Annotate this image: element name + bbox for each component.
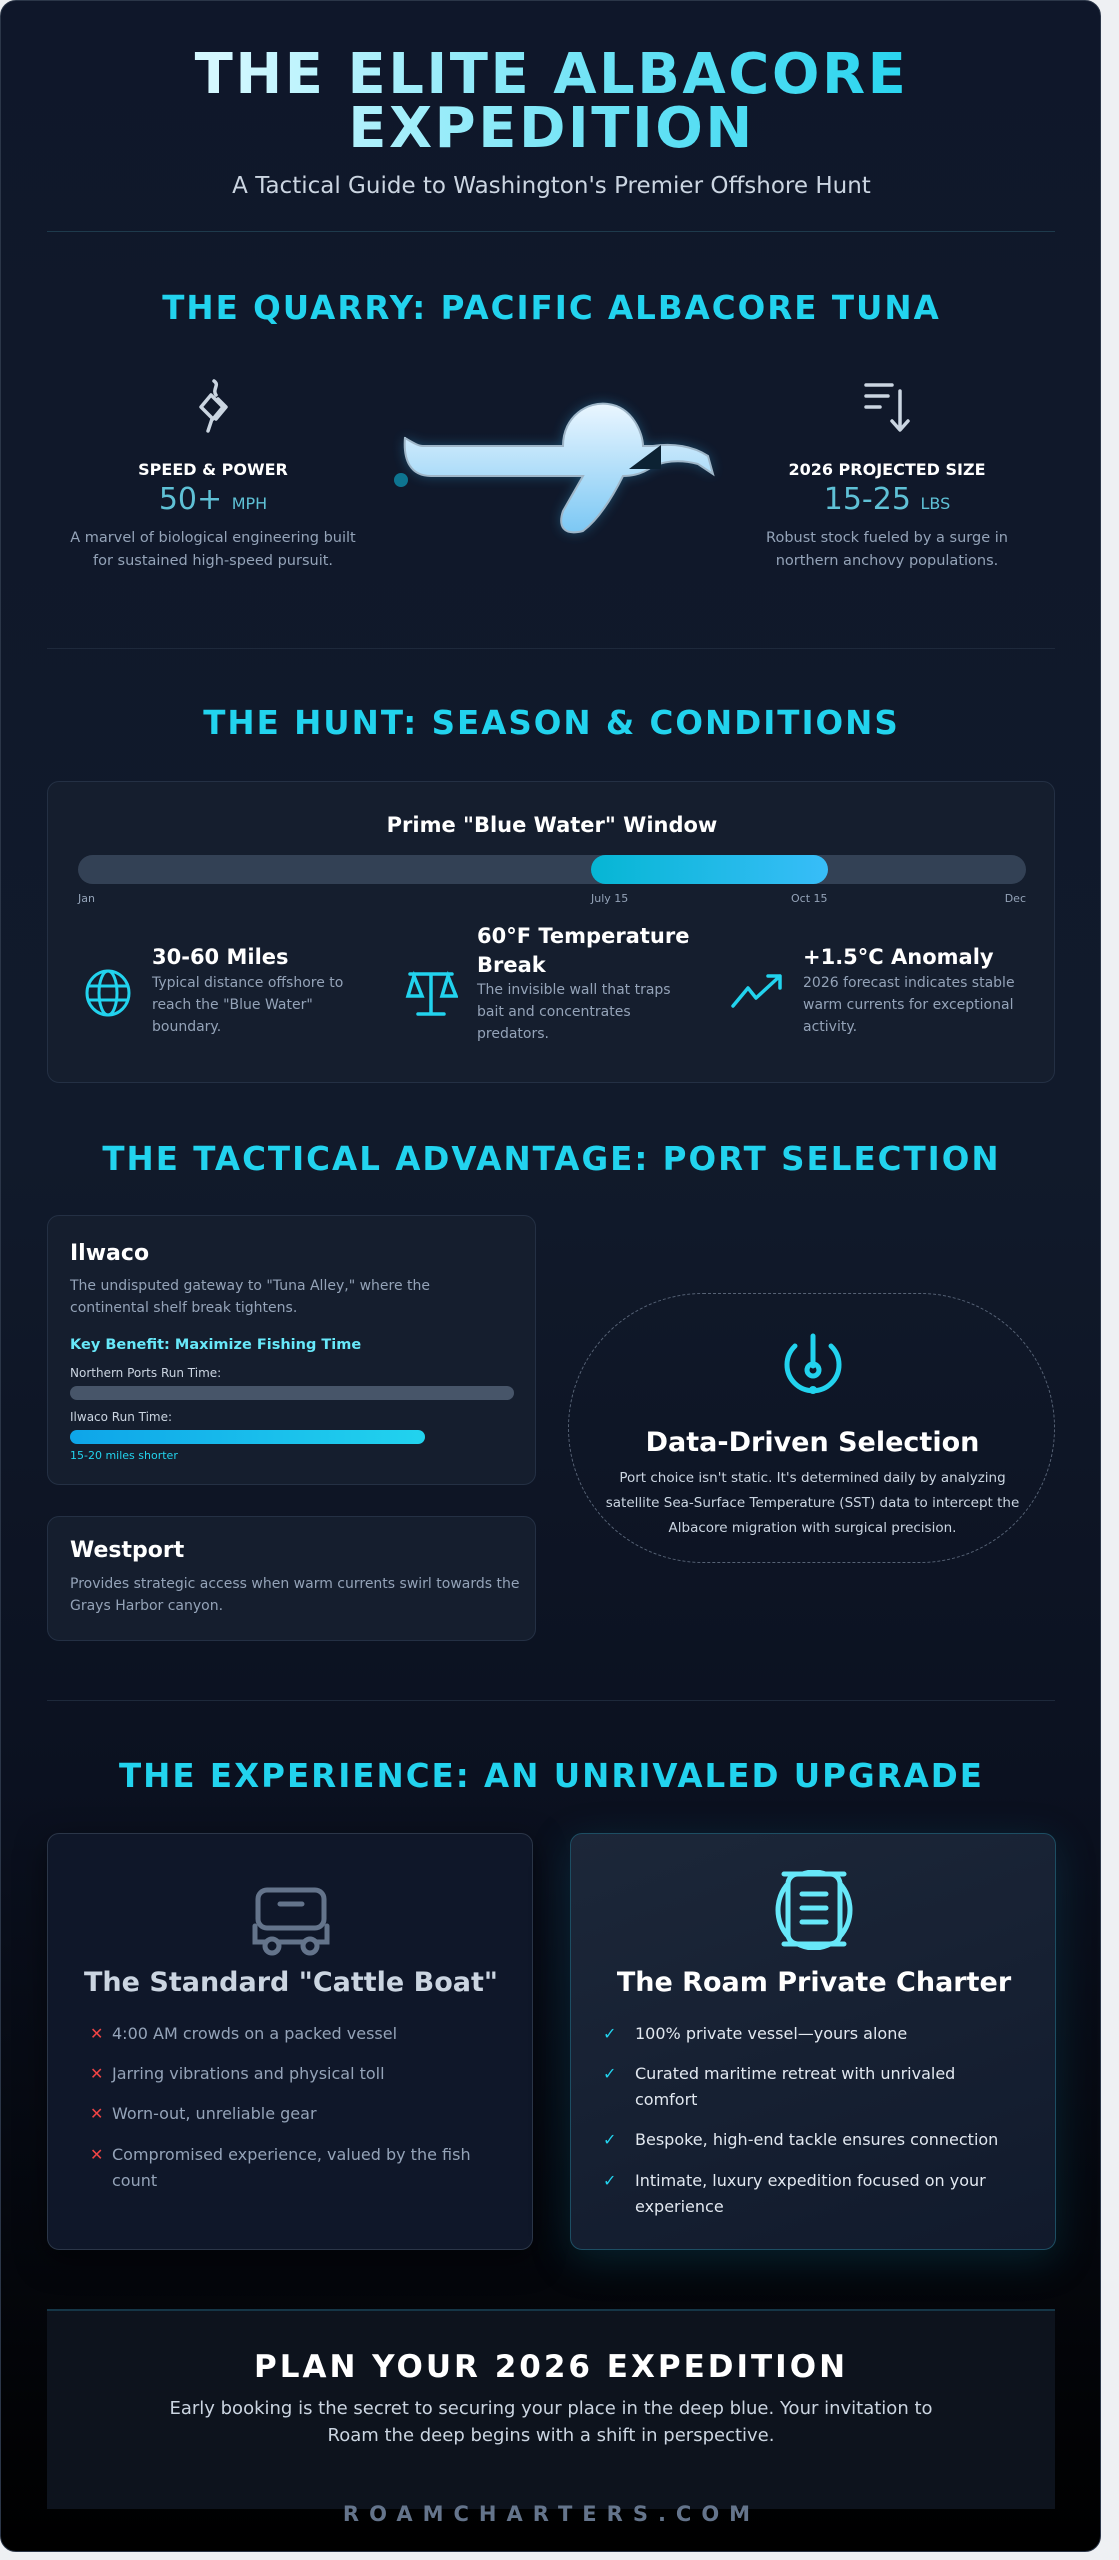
stat: speed & power: for sustained high-speed pursuit. (93, 553, 333, 569)
cta: plan your expedition: Early booking is the secret to securing your place in the deep blue. Your invitation to Roam the deep begins with a shift in perspective. (169, 2398, 933, 2446)
timeline labels: Jan (78, 892, 95, 905)
stat: anomaly: +1.5°C Anomaly (803, 945, 994, 969)
stat: speed & power (70, 379, 356, 569)
panel: ilwaco: Key Benefit: Maximize Fishing Time (70, 1337, 361, 1353)
stat: anomaly: 2026 forecast indicates stable warm currents for exceptional activity. (803, 975, 1015, 1035)
bar: northern ports (70, 1386, 514, 1400)
panel: season (47, 781, 1055, 1083)
cta: plan your expedition: PLAN YOUR 2026 EXPEDITION (254, 2349, 848, 2385)
stat: anomaly (731, 945, 1015, 1035)
stat: temperature break: The invisible wall that traps bait and concentrates predators. (477, 982, 671, 1042)
stat: projected size (766, 383, 1008, 569)
panel: cattle boat: ✕ (90, 2024, 103, 2043)
panel: westport: Provides strategic access when warm currents swirl towards the Grays Harbor canyon. (70, 1576, 519, 1614)
icon: sort down (864, 383, 910, 432)
icon: speed (199, 379, 228, 433)
panel: ilwaco: The undisputed gateway to "Tuna Alley," where the continental shelf break tightens. (70, 1278, 430, 1316)
heading: hunt: THE HUNT: SEASON & CONDITIONS (203, 704, 900, 742)
panel: ilwaco: Ilwaco (70, 1241, 149, 1266)
icon: yacht (776, 1870, 852, 1950)
stat: projected size: northern anchovy populations. (776, 553, 998, 569)
panel: ilwaco (47, 1215, 536, 1485)
icon: globe (86, 970, 130, 1016)
panel: roam private charter: 100% private vessel—yours alone (635, 2024, 907, 2043)
panel: roam private charter: ✓ (603, 2024, 616, 2043)
icon: scale (406, 970, 458, 1016)
panel: cattle boat: ✕ (90, 2145, 103, 2164)
panel: roam private charter: ✓ (603, 2064, 616, 2083)
timeline labels: Oct 15 (791, 892, 828, 905)
panel: cattle boat: ✕ (90, 2104, 103, 2123)
icon: bus (252, 1888, 330, 1956)
heading: quarry: THE QUARRY: PACIFIC ALBACORE TUNA (162, 289, 941, 327)
footer: website: ROAMCHARTERS.COM (343, 2502, 760, 2526)
heading: experience: THE EXPERIENCE: AN UNRIVALED UPGRADE (119, 1757, 984, 1795)
stat: projected size: 15-25 LBS (824, 482, 950, 517)
panel: ilwaco: Northern Ports Run Time: (70, 1366, 221, 1380)
icon: power gauge (784, 1334, 842, 1394)
panel: westport: Westport (70, 1538, 184, 1563)
stat: distance: 30-60 Miles (152, 945, 289, 969)
stat: speed & power: 50+ MPH (159, 482, 267, 517)
stat: speed & power: A marvel of biological engineering built (70, 530, 356, 546)
timeline bar (78, 855, 1026, 884)
panel: westport (47, 1516, 536, 1641)
panel: cattle boat: Jarring vibrations and physical toll (112, 2064, 385, 2083)
panel: cattle boat: ✕ (90, 2064, 103, 2083)
panel: ilwaco: 15-20 miles shorter (70, 1449, 178, 1462)
timeline labels (77, 892, 1026, 905)
subtitle: A Tactical Guide to Washington's Premier Offshore Hunt (232, 173, 871, 199)
bar: ilwaco (70, 1430, 425, 1444)
panel: ilwaco: Ilwaco Run Time: (70, 1410, 172, 1424)
stat: projected size: Robust stock fueled by a surge in (766, 530, 1008, 546)
panel: roam private charter: Bespoke, high-end tackle ensures connection (635, 2130, 998, 2149)
title (1, 48, 1102, 156)
stat: temperature break (406, 924, 689, 1042)
panel: roam private charter: The Roam Private Charter (617, 1967, 1011, 1998)
callout: data-driven selection (568, 1293, 1055, 1563)
icon: trending up (731, 974, 782, 1008)
callout: data-driven selection: Data-Driven Selection (646, 1427, 979, 1458)
timeline title: Prime "Blue Water" Window (387, 813, 717, 837)
callout: data-driven selection: Port choice isn't static. It's determined daily by analyzing satellite Sea-Surface Temperature (SST) data to intercept the Albacore migration with surgical precision. (606, 1470, 1019, 1536)
title: EXPEDITION (348, 96, 755, 161)
panel: roam private charter: Curated maritime retreat with unrivaled comfort (635, 2064, 955, 2109)
illustration: albacore tuna (394, 397, 716, 538)
cta: plan your expedition (47, 2309, 1055, 2509)
panel: roam private charter: Intimate, luxury expedition focused on your experience (635, 2171, 986, 2216)
panel: cattle boat (47, 1833, 533, 2250)
stat: speed & power: SPEED & POWER (138, 460, 288, 479)
panel: cattle boat: Compromised experience, valued by the fish count (112, 2145, 471, 2190)
panel: cattle boat: Worn-out, unreliable gear (112, 2104, 317, 2123)
title: THE ELITE ALBACORE (195, 42, 908, 107)
stat: projected size: 2026 PROJECTED SIZE (788, 460, 986, 479)
panel: roam private charter: ✓ (603, 2171, 616, 2190)
heading: port selection: THE TACTICAL ADVANTAGE: PORT SELECTION (102, 1140, 1001, 1178)
panel: roam private charter: ✓ (603, 2130, 616, 2149)
timeline labels: Dec (1005, 892, 1026, 905)
timeline labels: July 15 (591, 892, 628, 905)
panel: cattle boat: 4:00 AM crowds on a packed vessel (112, 2024, 397, 2043)
stat: distance: Typical distance offshore to reach the "Blue Water" boundary. (152, 975, 343, 1035)
stat: temperature break: 60°F Temperature Break (477, 924, 689, 977)
stat: distance (86, 945, 343, 1035)
panel: cattle boat: The Standard "Cattle Boat" (84, 1967, 498, 1998)
panel: roam private charter (570, 1833, 1056, 2250)
